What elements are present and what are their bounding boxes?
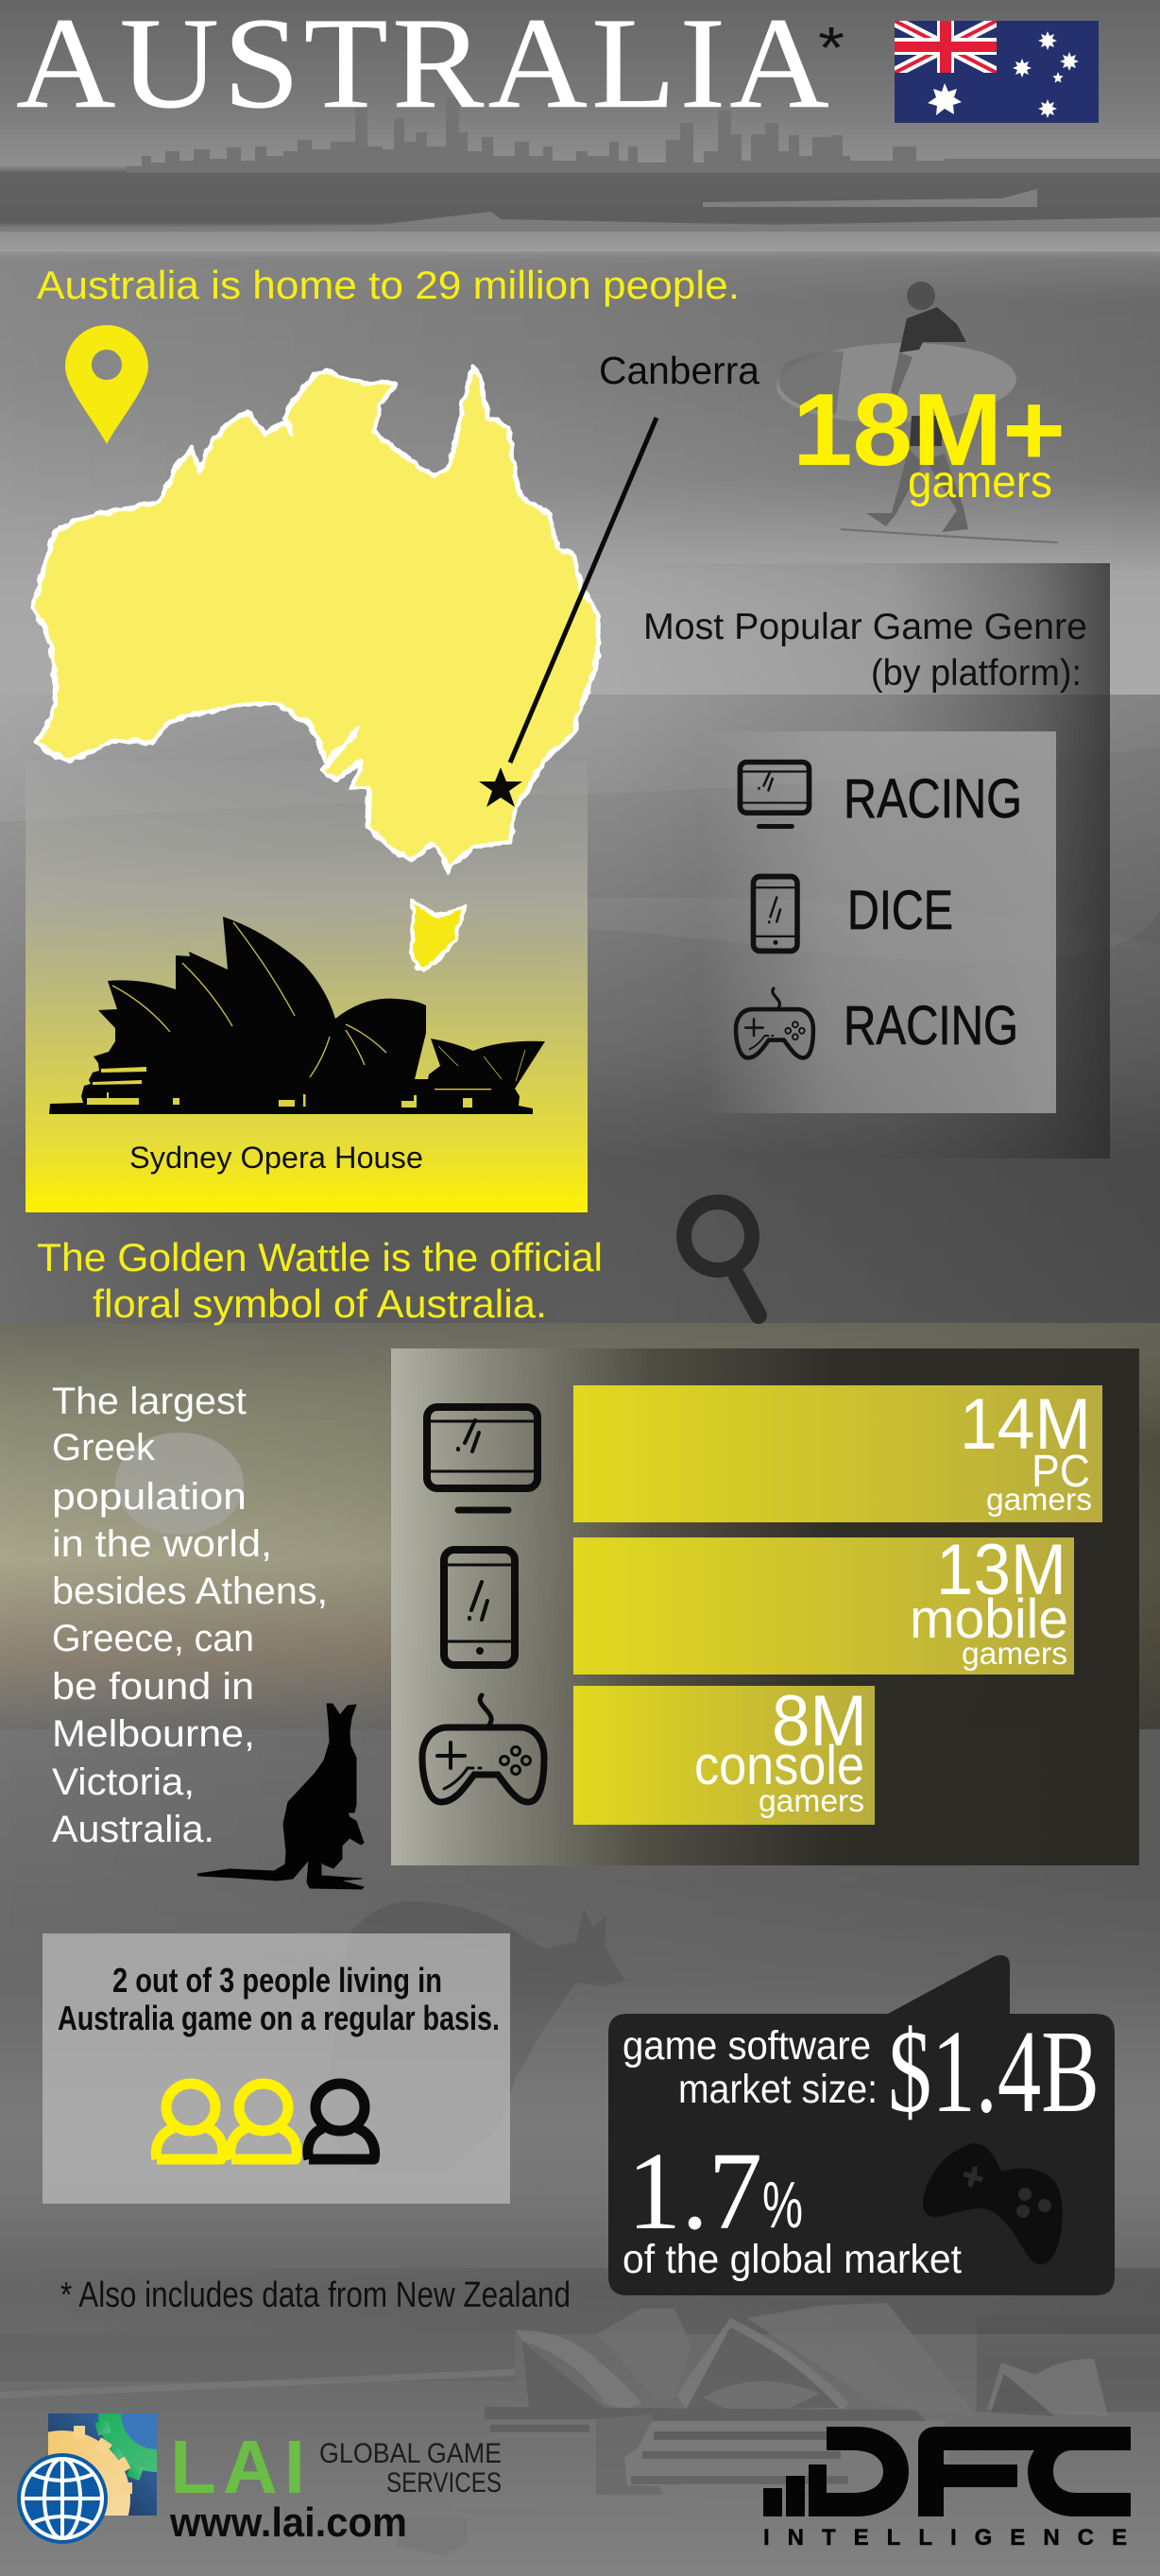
- logo: LAI Global Game Services: GLOBAL GAME: [319, 2438, 502, 2469]
- surfer silhouette: [776, 282, 1058, 542]
- footnote: * Also includes data from New Zealand: [60, 2275, 571, 2315]
- text block: Greek population fact: Greek: [52, 1427, 156, 1468]
- headline: population: Australia is home to 29 million people.: [37, 263, 740, 307]
- opera house silhouette: [49, 917, 545, 1114]
- icon: monitor: [740, 762, 810, 827]
- icon: three people: [156, 2084, 375, 2159]
- icon: kangaroo silhouette: [197, 1704, 364, 1889]
- fact: golden wattle: The Golden Wattle is the official: [37, 1235, 603, 1279]
- icon: phone: [444, 1550, 515, 1665]
- callout: market size: %: [762, 2168, 803, 2241]
- background: beach photo: [0, 0, 1160, 695]
- LAI wordmark: LAI: [170, 2425, 305, 2509]
- text: Australia game on a regular basis.: [58, 1999, 500, 2037]
- fact: golden wattle: floral symbol of Australia.: [93, 1281, 547, 1326]
- icon: gamepad: [422, 1695, 544, 1802]
- callout: market size: [608, 1955, 1115, 2295]
- bar: PC gamers: PC: [1032, 1447, 1090, 1497]
- bar: PC gamers: 14M: [960, 1384, 1091, 1465]
- text: [58, 1961, 500, 2037]
- text block: Greek population fact: Victoria,: [52, 1761, 195, 1803]
- title asterisk: *: [818, 16, 844, 81]
- label: Canberra: Canberra: [599, 349, 759, 392]
- heading: Most Popular Game Genre: [643, 607, 1087, 647]
- Canberra pointer line: [510, 418, 657, 763]
- background: sunset photo: [0, 1323, 1160, 1729]
- Canberra star: [479, 767, 522, 807]
- bar: console gamers: console: [694, 1735, 864, 1796]
- callout: market size: market size:: [678, 2067, 878, 2112]
- text block: Greek population fact: Australia.: [52, 1809, 214, 1850]
- genre: racing on console: RACING: [844, 995, 1018, 1056]
- bar: mobile gamers: gamers: [962, 1636, 1067, 1671]
- bar: mobile gamers: [573, 1530, 1074, 1674]
- stat: 18M+ gamers: gamers: [908, 457, 1052, 507]
- panel: gamers by platform bar chart: [391, 1348, 1139, 1865]
- bar: mobile gamers: mobile: [910, 1589, 1068, 1650]
- globe: [19, 2455, 106, 2542]
- panel: most popular game genre: [614, 563, 1110, 1159]
- heading: (by platform):: [871, 653, 1082, 694]
- text block: Greek population fact: in the world,: [52, 1523, 272, 1565]
- genre: racing on PC: RACING: [844, 768, 1022, 830]
- text block: Greek population fact: population: [52, 1476, 247, 1518]
- caption: Sydney Opera House: [129, 1141, 423, 1175]
- text: 2 out of 3 people living in: [112, 1961, 442, 2000]
- callout: market size: 1.7: [627, 2129, 762, 2253]
- logo: LAI Global Game Services: www.lai.com: [169, 2499, 407, 2546]
- fact: golden wattle: [37, 1235, 603, 1326]
- inner genre card: [703, 731, 1056, 1113]
- icon: magnifying glass: [684, 1202, 759, 1315]
- text block: Greek population fact: Melbourne,: [52, 1713, 255, 1755]
- text block: Greek population fact: The largest: [52, 1381, 247, 1422]
- panel: 2 out of 3 people: [43, 1933, 510, 2204]
- bar: console gamers: [573, 1681, 875, 1825]
- text block: Greek population fact: [52, 1381, 328, 1850]
- icon: gamepad: [736, 988, 813, 1057]
- opera house photo shells: [397, 2303, 1108, 2556]
- icon: solid gamepad: [923, 2143, 1063, 2264]
- mainland and Tasmania: [33, 367, 599, 970]
- logo: LAI Global Game Services: SERVICES: [386, 2467, 502, 2499]
- logo: DFC Intelligence: INTELLIGENCE: [763, 2525, 1127, 2550]
- yellow panel: Sydney Opera House: [26, 761, 588, 1212]
- callout: market size: game software: [623, 2023, 871, 2069]
- icon: Australian flag: [895, 21, 1099, 123]
- LAI emblem: [48, 2413, 157, 2516]
- bar: PC gamers: [573, 1384, 1102, 1522]
- icon: phone: [753, 877, 797, 951]
- callout: market size: of the global market: [623, 2237, 962, 2282]
- text block: Greek population fact: Greece, can: [52, 1618, 254, 1659]
- background: kangaroo and opera house photo: [0, 1729, 1160, 2576]
- heading: [643, 607, 1087, 694]
- bar: PC gamers: gamers: [986, 1482, 1092, 1517]
- genre: dice on mobile: DICE: [847, 880, 953, 941]
- logo: LAI Global Game Services: [17, 2413, 501, 2544]
- icon: monitor: [427, 1407, 537, 1510]
- bar: console gamers: gamers: [759, 1783, 864, 1818]
- bar: mobile gamers: 13M: [936, 1530, 1066, 1610]
- bar: console gamers: 8M: [772, 1681, 867, 1761]
- text block: Greek population fact: be found in: [52, 1666, 254, 1708]
- icon: map pin: [65, 325, 148, 444]
- map of Australia: [33, 367, 657, 970]
- logo: DFC Intelligence: [763, 2427, 1131, 2550]
- text block: Greek population fact: besides Athens,: [52, 1571, 328, 1612]
- stat: 18M+ gamers: 18M+: [793, 372, 1066, 488]
- background: misty hills photo: [0, 695, 1160, 1323]
